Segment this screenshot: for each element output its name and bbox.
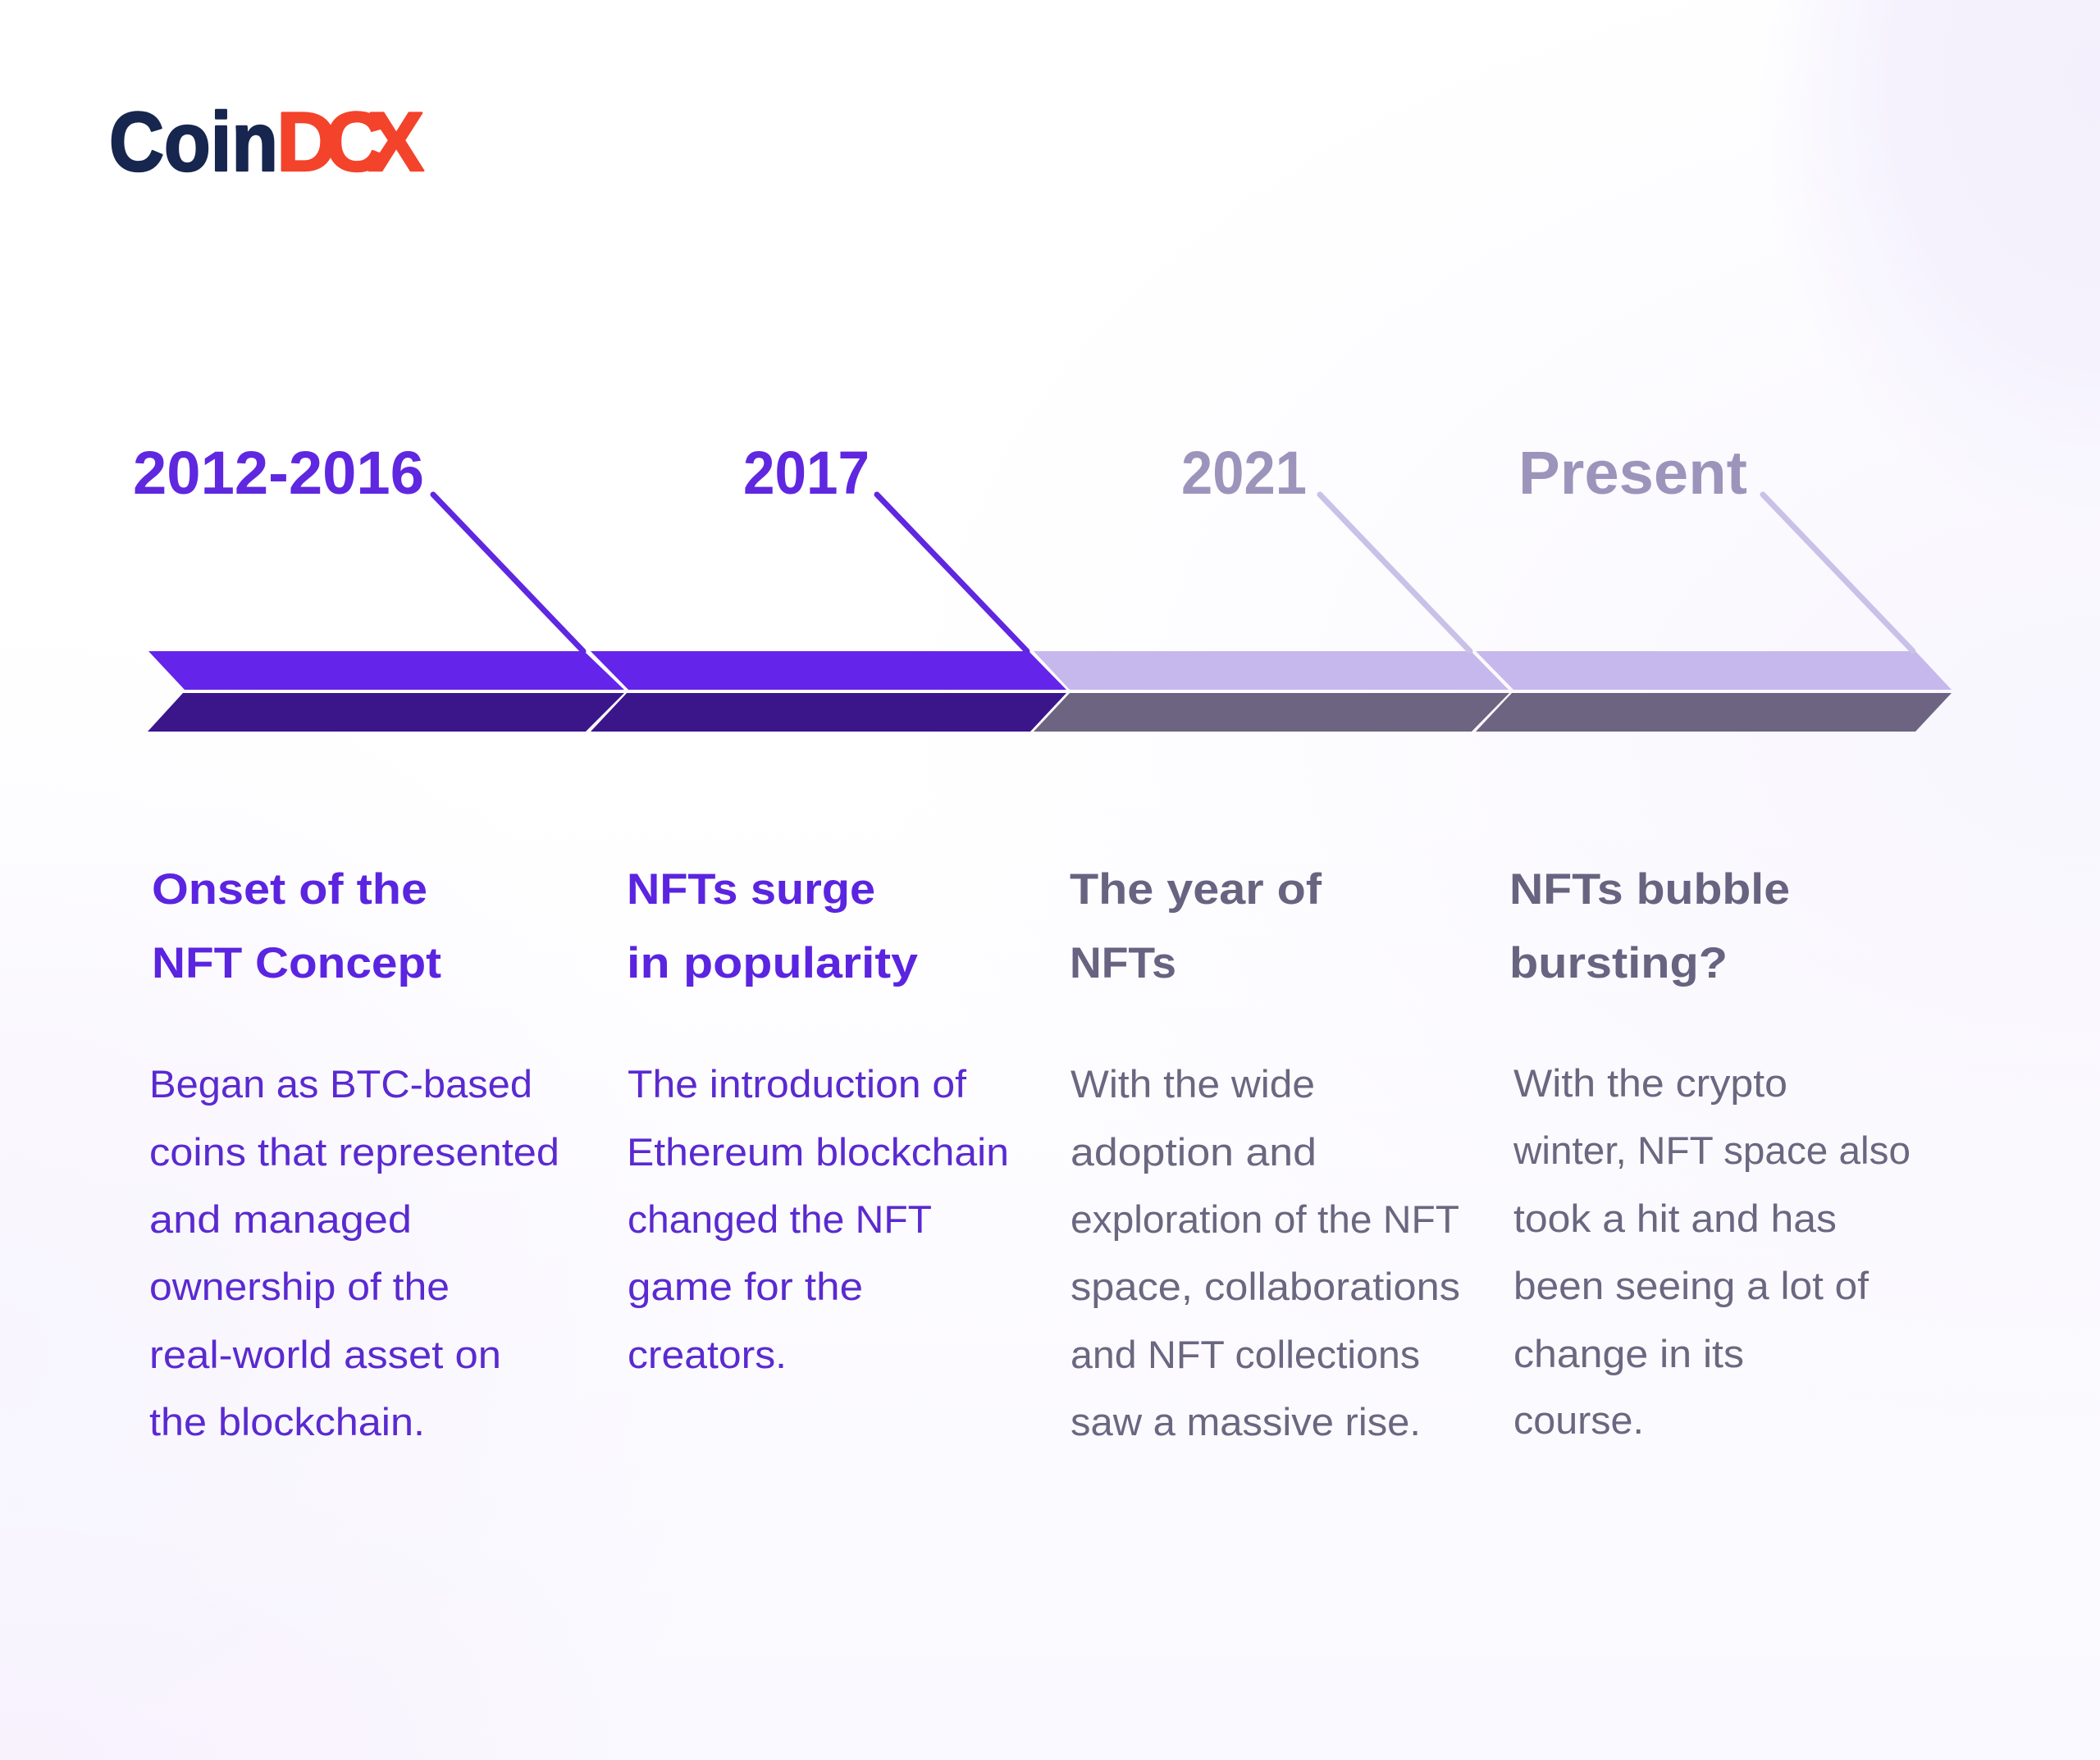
column 3 text: [1070, 865, 1460, 1443]
segment 3: 2021: [1034, 651, 1509, 732]
body: With the crypto: With the crypto: [1513, 1061, 1787, 1105]
connector: 2017: [877, 495, 1027, 651]
segment 4: Present: [1476, 651, 1952, 732]
timeline arrow bar: [148, 651, 1952, 732]
logo: CoinDCX: Coin: [109, 95, 278, 189]
connector: 2012-2016: [433, 495, 583, 651]
heading: The year of NFTs: The year of: [1070, 865, 1322, 914]
body: With the crypto: course.: [1513, 1398, 1644, 1442]
connector: Present: [1763, 495, 1913, 651]
year: 2012-2016: 2012-2016: [133, 439, 424, 507]
body: The introduction of: creators.: [628, 1333, 787, 1376]
year: 2017: 2017: [743, 439, 870, 507]
body: Began as BTC-based: the blockchain.: [149, 1400, 425, 1443]
connector lines: [433, 495, 1913, 651]
heading: NFTs surge in popularity: in popularity: [627, 939, 919, 987]
heading: The year of NFTs: NFTs: [1070, 939, 1176, 987]
year: Present: Present: [1518, 439, 1747, 507]
body: The introduction of: Ethereum blockchain: [627, 1130, 1009, 1174]
heading: Onset of the NFT Concept: [152, 865, 441, 987]
body: Began as BTC-based: coins that represented: [149, 1130, 559, 1174]
body: With the crypto: [1513, 1061, 1911, 1442]
body: With the wide: saw a massive rise.: [1071, 1400, 1421, 1443]
body: With the wide: [1071, 1062, 1460, 1443]
heading: NFTs bubble bursting?: bursting?: [1509, 939, 1728, 987]
heading: NFTs surge in popularity: [627, 865, 919, 987]
body: With the crypto: took a hit and has: [1513, 1197, 1837, 1240]
body: Began as BTC-based: and managed: [149, 1197, 412, 1241]
column 4 text: [1509, 865, 1911, 1442]
heading: NFTs bubble bursting?: [1509, 865, 1790, 987]
logo: CoinDCX: DCX: [276, 95, 424, 189]
body: The introduction of: [627, 1062, 1009, 1376]
segment 1: 2012-2016: [148, 651, 624, 732]
body: With the wide: adoption and: [1071, 1130, 1317, 1174]
connector: 2021: [1320, 495, 1470, 651]
year labels: [133, 439, 1747, 507]
heading: NFTs surge in popularity: NFTs surge: [627, 865, 875, 914]
column 1 text: [149, 865, 559, 1443]
heading: Onset of the NFT Concept: Onset of the: [152, 865, 427, 914]
body: With the crypto: been seeing a lot of: [1513, 1264, 1869, 1307]
body: With the wide: and NFT collections: [1071, 1333, 1420, 1376]
heading: The year of NFTs: [1070, 865, 1322, 987]
year: 2021: 2021: [1181, 439, 1307, 507]
column 2 text: [627, 865, 1009, 1376]
body: Began as BTC-based: real-world asset on: [149, 1333, 501, 1376]
body: Began as BTC-based: [149, 1062, 559, 1443]
body: With the crypto: change in its: [1513, 1332, 1744, 1375]
body: The introduction of: changed the NFT: [628, 1197, 932, 1241]
segment 2: 2017: [591, 651, 1066, 732]
body: With the crypto: winter, NFT space also: [1513, 1128, 1911, 1172]
body: Began as BTC-based: Began as BTC-based: [149, 1062, 532, 1106]
heading: Onset of the NFT Concept: NFT Concept: [152, 939, 441, 987]
body: With the wide: exploration of the NFT: [1071, 1197, 1459, 1241]
body: Began as BTC-based: ownership of the: [149, 1265, 450, 1308]
body: With the wide: space, collaborations: [1071, 1265, 1460, 1308]
body: The introduction of: game for the: [628, 1265, 863, 1308]
logo: CoinDCX: [109, 95, 424, 189]
heading: NFTs bubble bursting?: NFTs bubble: [1509, 865, 1790, 914]
body: The introduction of: The introduction of: [628, 1062, 967, 1106]
body: With the wide: With the wide: [1071, 1062, 1315, 1106]
